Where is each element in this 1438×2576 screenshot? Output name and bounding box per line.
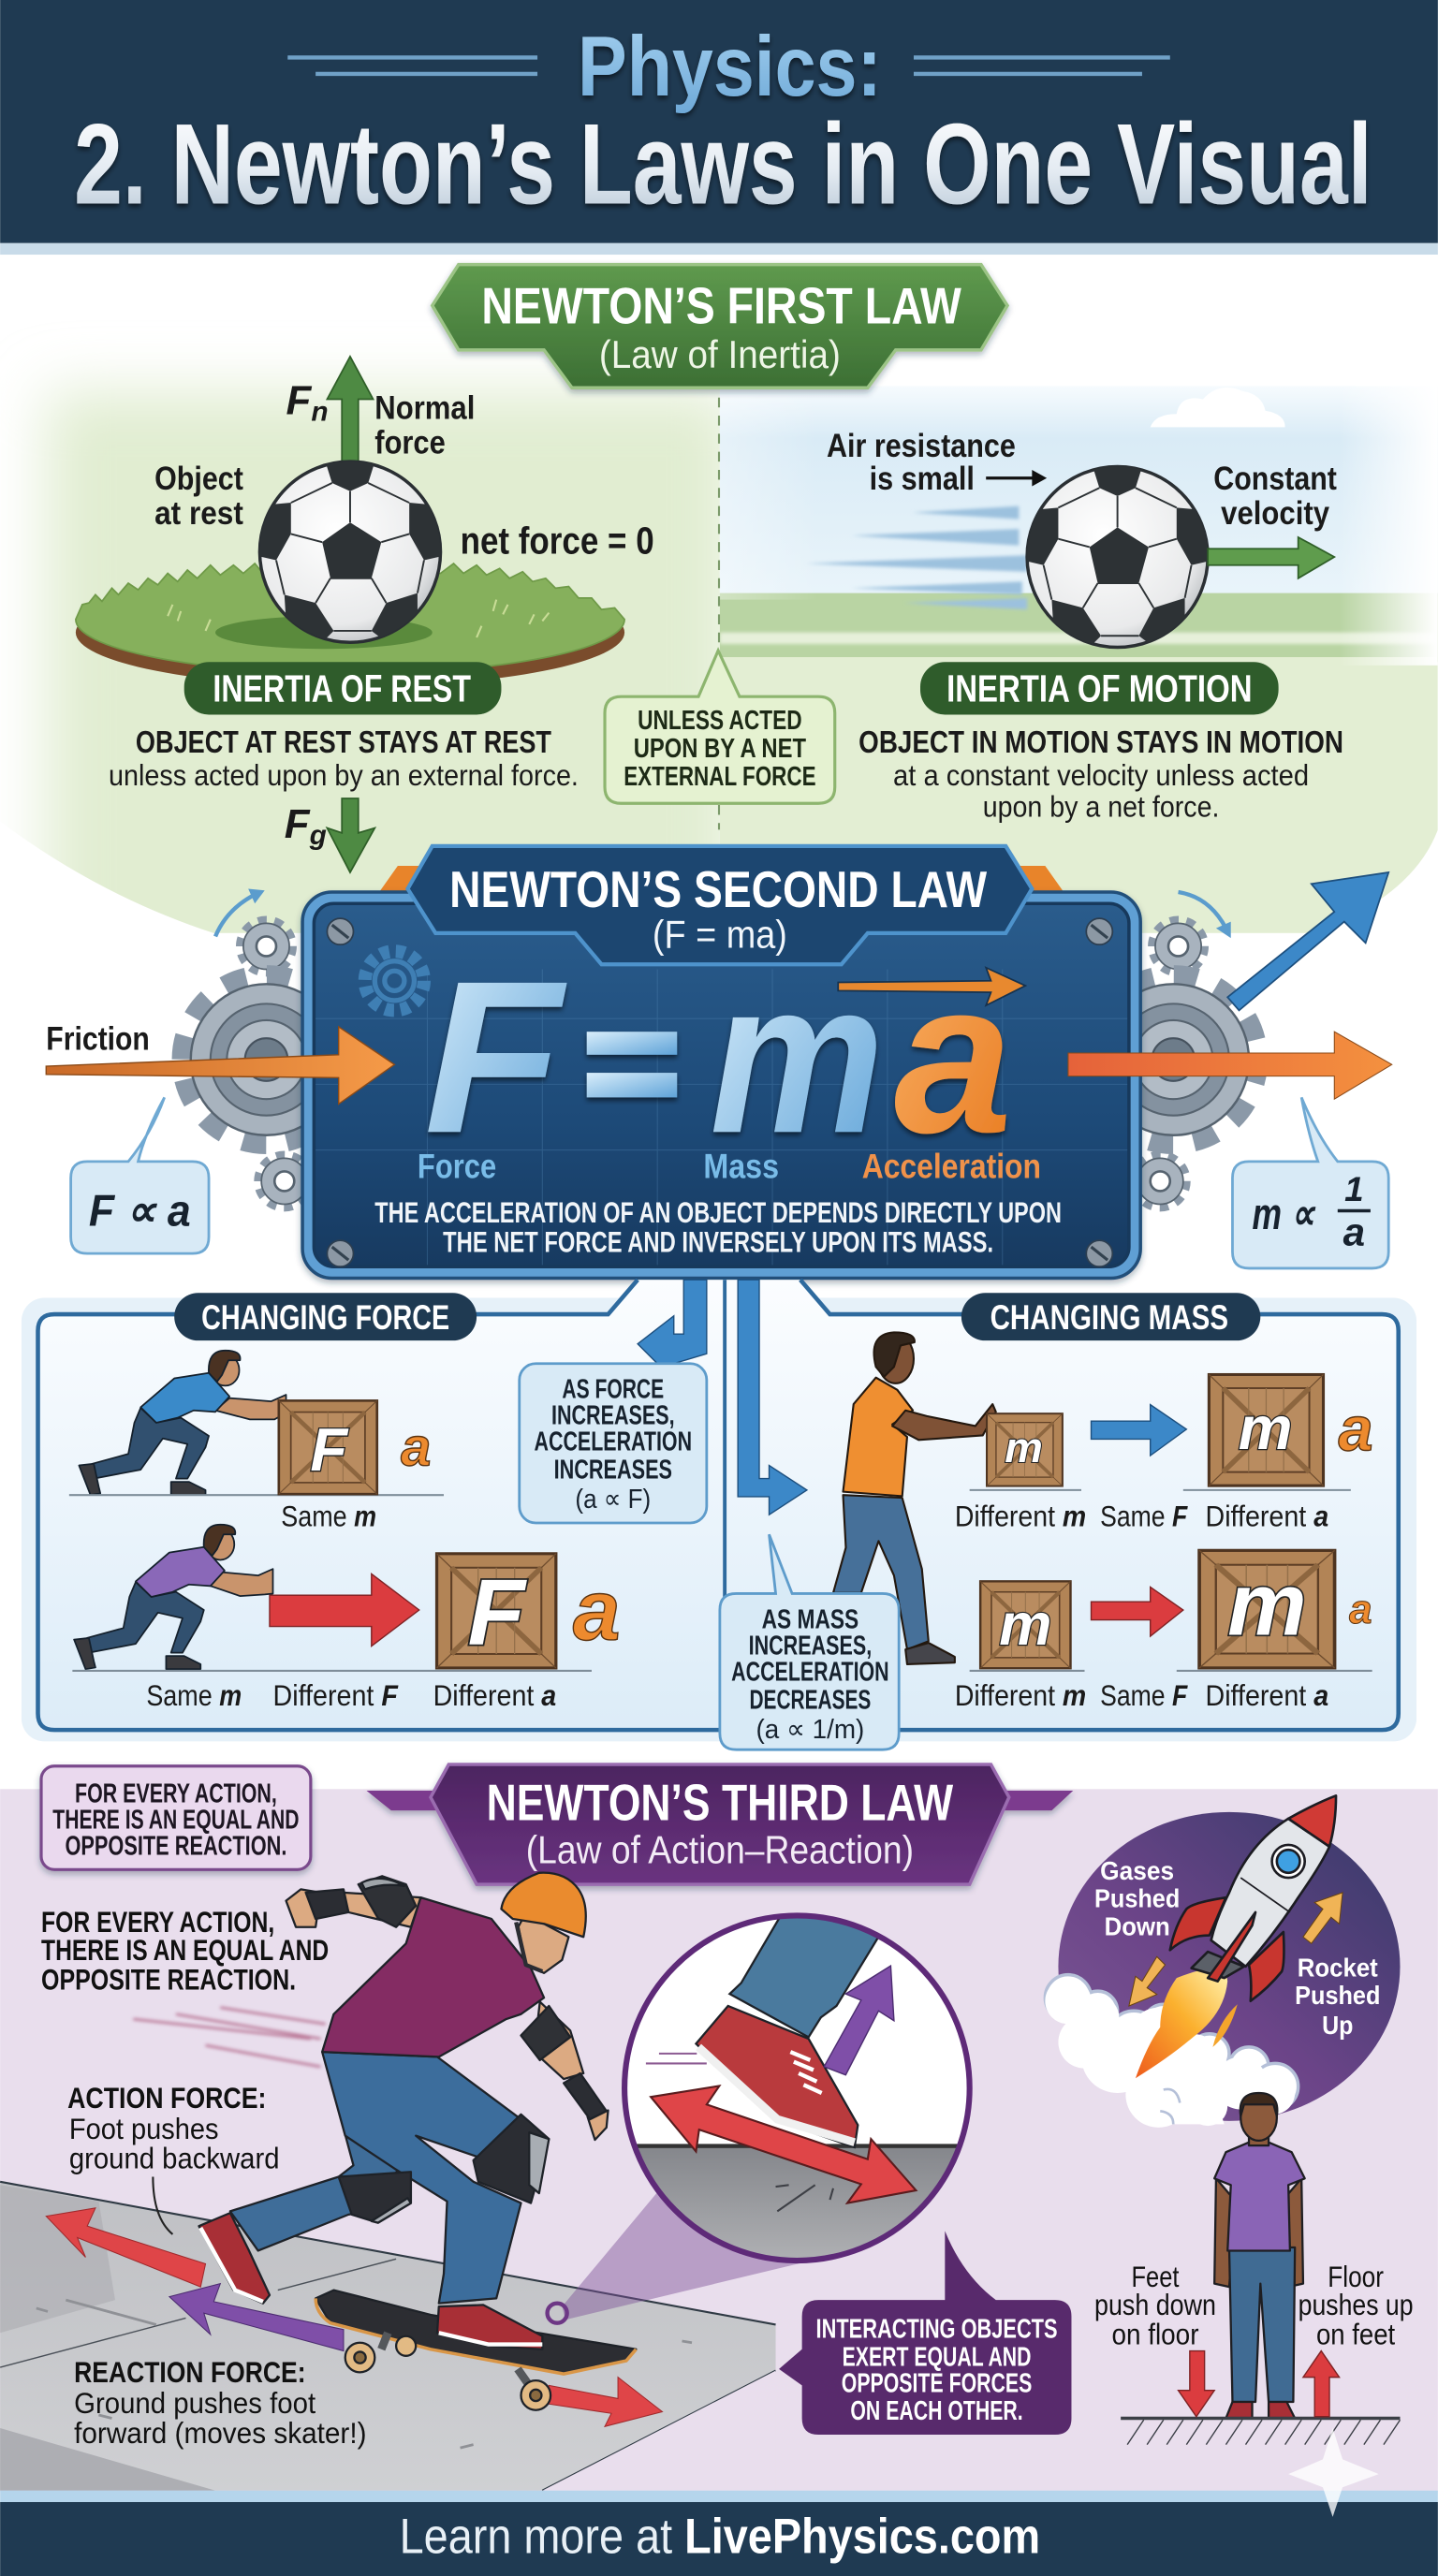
icon: panel gear xyxy=(365,951,424,1010)
third law banner xyxy=(367,1764,1073,1884)
icon: jeans xyxy=(728,1919,878,2039)
callout: for every action box: FOR EVERY ACTION, xyxy=(75,1778,277,1808)
callout: as force increases: AS FORCE xyxy=(562,1375,664,1405)
arrow: feet down xyxy=(1179,2351,1214,2417)
jeans back leg xyxy=(230,2098,414,2250)
skateboard xyxy=(315,2291,636,2410)
crate m medium: m xyxy=(1239,1394,1292,1462)
crate m large: m xyxy=(1227,1555,1306,1654)
arrow: floor up xyxy=(1303,2351,1340,2417)
panel: changing force and mass frame xyxy=(38,1280,1399,1730)
second law banner: (F = ma) xyxy=(653,913,787,957)
arrow: output xyxy=(1068,1032,1392,1099)
label rocket xyxy=(1295,1953,1380,2040)
icon: grass platform xyxy=(76,564,624,687)
label friction: Friction xyxy=(46,1021,150,1058)
pill: inertia of motion: INERTIA OF MOTION xyxy=(946,666,1253,710)
arrow: blue xyxy=(1092,1405,1186,1456)
callout: unless acted xyxy=(605,651,835,803)
label a big: a xyxy=(573,1563,621,1659)
crate m large xyxy=(1199,1550,1335,1668)
callout: as force increases: ACCELERATION xyxy=(535,1427,692,1457)
labels row top: Different a xyxy=(1206,1499,1328,1532)
label feet: push down xyxy=(1094,2288,1216,2321)
callout: interacting objects xyxy=(779,2231,1071,2435)
callout: interacting objects: EXERT EQUAL AND xyxy=(843,2342,1031,2372)
label Fg: g xyxy=(309,820,327,851)
callout: F prop a xyxy=(71,1097,209,1253)
text: object in motion xyxy=(858,725,1343,823)
footer: Learn more at LivePhysics.com xyxy=(400,2509,1040,2564)
description: THE NET FORCE AND INVERSELY UPON ITS MASS. xyxy=(443,1224,993,1258)
label normal force: force xyxy=(374,424,446,461)
arrow: reaction force xyxy=(169,2284,344,2351)
icon: small circle xyxy=(548,2304,567,2323)
label constant velocity xyxy=(1213,461,1337,532)
text: reaction force: REACTION FORCE: xyxy=(74,2355,306,2389)
lower second-law section background xyxy=(22,1298,1416,1741)
figure: man in blue pushing xyxy=(79,1351,286,1495)
icon: velocity arrow xyxy=(1208,537,1334,578)
labels row bottom xyxy=(955,1678,1328,1712)
arrow: purple up xyxy=(824,1966,894,2075)
arrow: red double xyxy=(651,2086,916,2203)
arrow: diagonal blue xyxy=(1227,872,1388,1010)
callout: as force increases: INCREASES xyxy=(554,1456,672,1486)
back shoe xyxy=(199,2213,270,2304)
text: object at rest xyxy=(109,725,579,792)
label Fg: F xyxy=(285,801,310,847)
pill: inertia of motion xyxy=(920,662,1279,714)
label object at rest: at rest xyxy=(154,495,243,532)
front shoe xyxy=(437,2305,542,2349)
footer xyxy=(0,2491,1438,2576)
speed lines xyxy=(133,2008,326,2067)
icon: clouds xyxy=(1045,1975,1299,2128)
formula F = ma: F xyxy=(424,936,567,1178)
icon: ball at rest xyxy=(255,457,446,644)
label gases: Gases xyxy=(1100,1856,1174,1885)
text: for every action: THERE IS AN EQUAL AND xyxy=(41,1933,329,1967)
arrow: forward xyxy=(546,2378,662,2426)
text: reaction force xyxy=(74,2355,367,2450)
label object at rest xyxy=(154,461,243,532)
label Fn: n xyxy=(311,396,329,427)
label floor: Floor xyxy=(1328,2260,1384,2293)
icon: cloud xyxy=(1151,388,1285,427)
formula F = ma xyxy=(424,936,1012,1178)
pavement xyxy=(0,2182,776,2491)
panel: second law xyxy=(302,846,1140,1278)
label constant velocity: Constant xyxy=(1213,461,1337,497)
pill: changing mass: CHANGING MASS xyxy=(990,1298,1228,1337)
crate m small xyxy=(987,1413,1063,1486)
labels row top: Same F xyxy=(1100,1499,1188,1532)
pill: changing force xyxy=(174,1293,477,1340)
text: action force: ground backward xyxy=(69,2142,280,2175)
label feet: Feet xyxy=(1132,2260,1180,2293)
text: object in motion: upon by a net force. xyxy=(983,789,1219,823)
shirt xyxy=(322,1897,544,2056)
label a: a xyxy=(1339,1396,1373,1465)
icon: flame xyxy=(1136,1969,1238,2078)
label a small: a xyxy=(1349,1587,1372,1632)
third law banner: NEWTON’S THIRD LAW xyxy=(487,1775,954,1832)
arrow: action force xyxy=(46,2208,206,2287)
text: reaction force: forward (moves skater!) xyxy=(74,2416,367,2450)
formula F = ma: m xyxy=(710,936,884,1178)
callout: unless acted: UPON BY A NET xyxy=(634,734,806,764)
text: reaction force: Ground pushes foot xyxy=(74,2386,315,2420)
label rocket: Rocket xyxy=(1298,1953,1378,1982)
label feet: on floor xyxy=(1111,2318,1198,2351)
text: action force: Foot pushes xyxy=(69,2112,219,2145)
figure: man in orange pushing xyxy=(833,1332,996,1664)
callout: as mass increases xyxy=(720,1534,899,1749)
label net force: net force = 0 xyxy=(461,519,654,562)
callout: unless acted: EXTERNAL FORCE xyxy=(624,762,816,792)
callout: for every action box: OPPOSITE REACTION. xyxy=(65,1832,286,1862)
first law banner xyxy=(433,265,1007,388)
figure: man in purple pushing xyxy=(74,1525,272,1669)
label floor: on feet xyxy=(1316,2318,1395,2351)
callout: for every action box: THERE IS AN EQUAL AND xyxy=(52,1805,300,1835)
icon: speed lines xyxy=(805,506,1027,609)
callout: as force increases xyxy=(520,1364,707,1523)
labels row: Same m xyxy=(146,1678,242,1712)
labels row bottom: Same F xyxy=(1100,1678,1188,1712)
panel: third law background xyxy=(0,1789,1438,2492)
crate m medium xyxy=(1209,1374,1324,1486)
label feet xyxy=(1094,2260,1216,2351)
second law banner: NEWTON’S SECOND LAW xyxy=(449,861,988,918)
callout: interacting objects: OPPOSITE FORCES xyxy=(842,2368,1032,2398)
labels row bottom: Different a xyxy=(1206,1678,1328,1712)
arrow: gases down xyxy=(1129,1956,1166,2006)
crate m small: m xyxy=(1005,1424,1043,1471)
arrow: friction xyxy=(46,1027,394,1104)
label a: a xyxy=(401,1418,431,1478)
label gases: Pushed xyxy=(1094,1884,1180,1913)
text: for every action: OPPOSITE REACTION. xyxy=(41,1962,296,1996)
icon: rocket xyxy=(1170,1795,1336,2001)
label floor: pushes up xyxy=(1299,2288,1414,2321)
first law banner: NEWTON’S FIRST LAW xyxy=(481,278,961,335)
pill: changing mass xyxy=(961,1293,1260,1340)
callout: interacting objects: ON EACH OTHER. xyxy=(850,2396,1023,2426)
arrow: red force xyxy=(270,1573,419,1647)
labels row top xyxy=(955,1499,1328,1532)
label rocket: Pushed xyxy=(1295,1981,1380,2010)
labels row xyxy=(146,1678,556,1712)
label normal force: Normal xyxy=(374,390,475,427)
figure: standing person xyxy=(1214,2093,1305,2419)
icon: Fn arrow xyxy=(327,357,374,468)
front arm xyxy=(521,2002,609,2140)
formula F = ma: a xyxy=(894,936,1012,1178)
callout: m prop 1/a: 1 xyxy=(1344,1170,1364,1208)
icon: Fg arrow xyxy=(327,798,374,872)
icon: sparkle xyxy=(1288,2428,1379,2517)
text: object at rest: unless acted upon by an external force. xyxy=(109,758,579,792)
label constant velocity: velocity xyxy=(1221,495,1329,532)
labels row: Different F xyxy=(272,1678,399,1712)
callout: as force increases: (a ∝ F) xyxy=(575,1485,651,1515)
label Fn: F xyxy=(286,377,311,423)
head xyxy=(501,1873,586,1973)
pill: inertia of rest: INERTIA OF REST xyxy=(213,666,471,710)
description xyxy=(374,1195,1062,1258)
magnifier cone xyxy=(562,2188,825,2320)
labels row: Different a xyxy=(433,1678,556,1712)
crate F big: F xyxy=(468,1560,528,1665)
first law banner: (Law of Inertia) xyxy=(599,332,841,376)
callout: as mass increases: INCREASES, xyxy=(749,1631,872,1661)
callout: F prop a: F ∝ a xyxy=(89,1186,191,1236)
arrow: to changing mass xyxy=(738,1280,807,1515)
jeans xyxy=(322,2052,521,2304)
arrow: rocket up xyxy=(1303,1893,1343,1943)
text: action force xyxy=(67,2081,280,2175)
pill: inertia of rest xyxy=(184,662,501,714)
leader line xyxy=(153,2177,172,2234)
text: object in motion: at a constant velocity unless acted xyxy=(893,758,1309,792)
text: object in motion: OBJECT IN MOTION STAYS IN MOTION xyxy=(858,725,1343,760)
icon: red shoe xyxy=(696,2006,858,2147)
labels row top: Different m xyxy=(955,1499,1086,1532)
arrow: red small xyxy=(1092,1587,1183,1636)
title banner xyxy=(0,0,1438,255)
icon: gears left xyxy=(184,889,348,1206)
callout: m prop 1/a: m ∝ xyxy=(1253,1190,1316,1239)
label object at rest: Object xyxy=(154,461,243,497)
callout: unless acted: UNLESS ACTED xyxy=(638,706,802,736)
callout: as mass increases: AS MASS xyxy=(762,1604,858,1634)
formula labels: Force xyxy=(418,1147,496,1185)
label gases xyxy=(1094,1856,1180,1941)
icon: screws xyxy=(327,918,1112,1266)
labels row bottom: Different m xyxy=(955,1678,1086,1712)
callout: m prop 1/a xyxy=(1232,1097,1388,1268)
callout: interacting objects: INTERACTING OBJECTS xyxy=(816,2315,1058,2345)
title: Physics: Physics: xyxy=(578,19,882,114)
label normal force xyxy=(374,390,475,461)
magnifier xyxy=(622,1912,973,2263)
icon: acceleration vector xyxy=(838,968,1025,1005)
crate m lower: m xyxy=(999,1592,1051,1658)
panel: first law background xyxy=(21,364,1438,933)
crate F small xyxy=(279,1400,377,1494)
crate F small: F xyxy=(310,1415,349,1484)
divider xyxy=(718,398,720,829)
callout: m prop 1/a: a xyxy=(1343,1209,1365,1253)
formula labels: Mass xyxy=(703,1147,779,1185)
formula labels: Acceleration xyxy=(862,1147,1041,1185)
text: action force: ACTION FORCE: xyxy=(67,2081,266,2115)
callout: as mass increases: DECREASES xyxy=(749,1685,871,1715)
text: object at rest: OBJECT AT REST STAYS AT REST xyxy=(136,725,551,760)
label air resistance: Air resistance xyxy=(827,428,1016,464)
callout: as force increases: INCREASES, xyxy=(551,1401,675,1431)
ground line xyxy=(72,1670,592,1672)
pill: changing force: CHANGING FORCE xyxy=(201,1298,449,1337)
ground lines right xyxy=(970,1490,1372,1671)
label air resistance: is small xyxy=(870,461,975,497)
ground hatch xyxy=(1121,2419,1400,2445)
callout: as mass increases: (a ∝ 1/m) xyxy=(756,1715,864,1745)
figure: skater xyxy=(199,1873,636,2410)
ground line xyxy=(69,1494,444,1496)
icon: small arrow xyxy=(986,470,1047,487)
label gases: Down xyxy=(1105,1912,1170,1941)
back arm xyxy=(286,1876,420,1927)
icon: gears right xyxy=(1092,892,1255,1206)
crate m lower xyxy=(980,1581,1070,1668)
description: THE ACCELERATION OF AN OBJECT DEPENDS DIRECTLY UPON xyxy=(374,1195,1062,1229)
third law banner: (Law of Action–Reaction) xyxy=(526,1827,914,1871)
knee pads xyxy=(339,2115,549,2223)
callout: for every action box xyxy=(41,1766,311,1869)
text: for every action xyxy=(41,1905,329,1996)
icon: ball in motion xyxy=(1022,461,1212,649)
second law banner xyxy=(407,846,1032,964)
label same m: Same m xyxy=(281,1499,376,1532)
label floor xyxy=(1299,2260,1414,2351)
label air resistance xyxy=(827,428,1016,497)
rocket scene xyxy=(1045,1795,1400,2128)
callout: as mass increases: ACCELERATION xyxy=(731,1657,889,1687)
text: for every action: FOR EVERY ACTION, xyxy=(41,1905,274,1939)
arrow: to changing force xyxy=(638,1280,707,1380)
crate F big xyxy=(437,1554,556,1668)
icon: orange tabs xyxy=(378,866,1064,894)
label rocket: Up xyxy=(1322,2011,1353,2040)
formula labels xyxy=(418,1147,1041,1185)
